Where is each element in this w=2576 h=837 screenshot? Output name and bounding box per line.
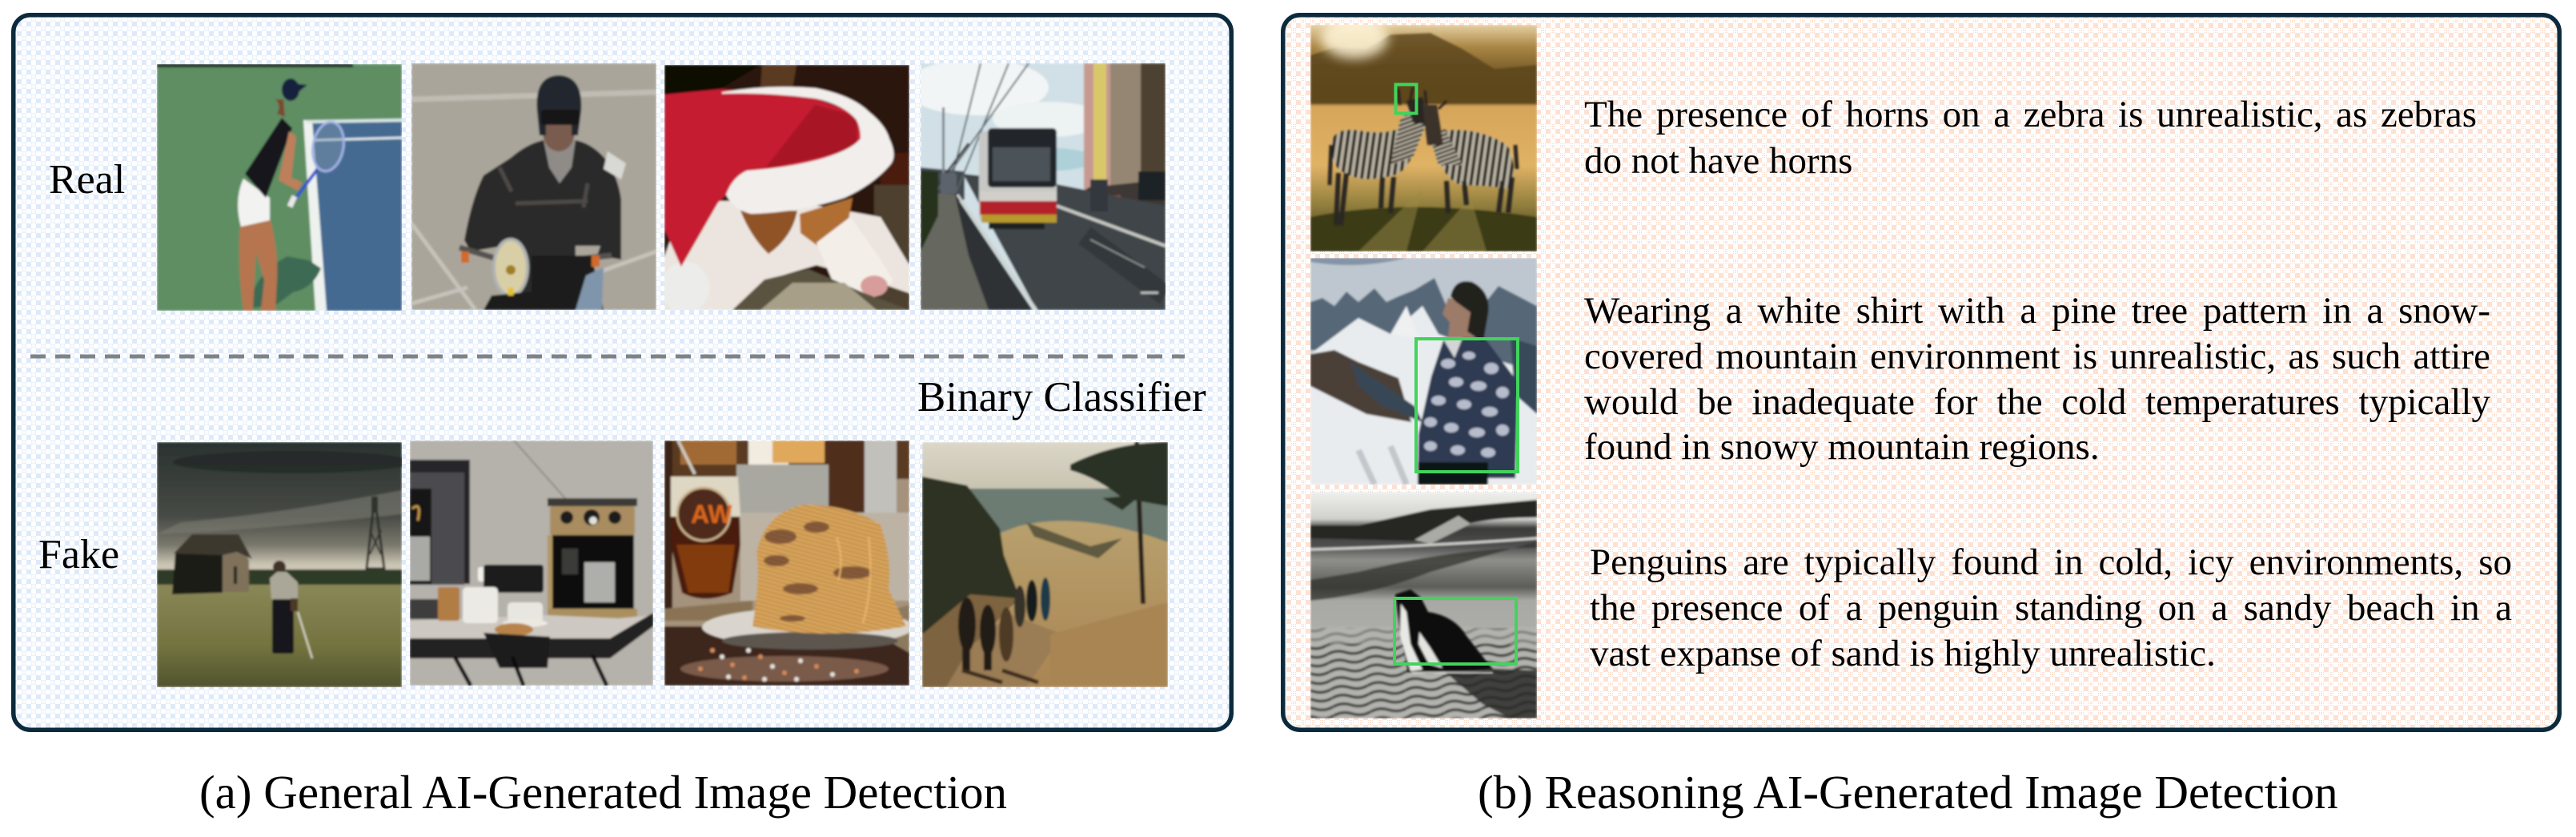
image: people walking on a hillside (fake)	[922, 442, 1168, 687]
fur trim	[722, 87, 893, 214]
text: The presence of horns on a zebra is unrealistic, as zebras	[1584, 94, 2477, 135]
red hat	[664, 89, 865, 267]
image: motorcycle rider (real)	[411, 63, 656, 310]
text block: shirt explanation	[1584, 290, 2490, 468]
text: found in snowy mountain regions.	[1584, 426, 2100, 468]
panel: reasoning AI-generated image detection	[1281, 13, 2562, 732]
image: noodles and root beer (fake): AW	[691, 500, 732, 529]
text block: penguin explanation	[1590, 541, 2512, 674]
image: zebras with horns	[1310, 25, 1537, 252]
annotation box: shirt	[1416, 339, 1518, 472]
text: covered mountain environment is unrealistic, as such attire	[1584, 336, 2490, 377]
image: tennis player (real)	[157, 64, 402, 311]
image: penguin on a sand dune	[1310, 492, 1537, 718]
text: Penguins are typically found in cold, icy environments, so	[1590, 541, 2512, 583]
image: dog in a Santa hat (real)	[664, 65, 909, 310]
panel: general AI-generated image detection	[11, 13, 1234, 732]
text: the presence of a penguin standing on a sandy beach in a	[1590, 587, 2512, 629]
image: noodles and root beer (fake)	[664, 441, 909, 686]
text block: zebra explanation	[1584, 94, 2477, 182]
image: man in pine-pattern shirt on a snowy mountain	[1310, 258, 1537, 485]
dog body	[664, 201, 909, 310]
text: do not have horns	[1584, 140, 1852, 182]
image: barn and man in field (fake)	[157, 442, 402, 687]
annotation box: horns	[1396, 85, 1417, 114]
label: Binary Classifier: Binary Classifier	[917, 373, 1206, 420]
divider: dashed line between real and fake	[30, 354, 1185, 359]
text: would be inadequate for the cold temperatures typically	[1584, 381, 2490, 423]
label: Real: Real	[49, 157, 125, 202]
text: Wearing a white shirt with a pine tree pattern in a snow-	[1584, 290, 2490, 332]
annotation box: penguin	[1394, 598, 1516, 664]
label: Fake: Fake	[38, 532, 119, 577]
caption: panel a: (a) General AI-Generated Image Detection	[199, 766, 1007, 819]
penguin	[1395, 590, 1493, 673]
image: coffee machine on a table (fake)	[410, 441, 653, 686]
caption: panel b: (b) Reasoning AI-Generated Image Detection	[1478, 766, 2338, 819]
image: street with a bus (real)	[921, 63, 1166, 310]
text: vast expanse of sand is highly unrealistic.	[1590, 633, 2216, 674]
